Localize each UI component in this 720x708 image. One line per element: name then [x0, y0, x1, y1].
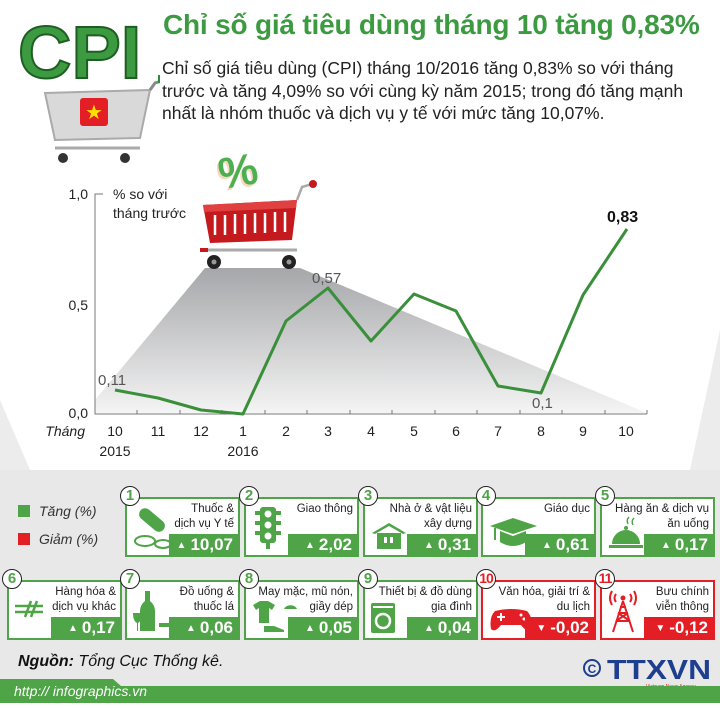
text: 6: [8, 570, 16, 587]
line chart: % so với: [113, 186, 167, 202]
box 2: Giao thông: [297, 503, 353, 515]
line chart: 6: [452, 423, 460, 439]
icon: red cart with %: [200, 144, 317, 269]
text: 4: [482, 487, 490, 504]
box 10: du lịch: [557, 601, 590, 613]
line chart: 10: [107, 423, 123, 439]
line chart: 0,0: [69, 405, 88, 421]
line chart: 12: [193, 423, 209, 439]
line chart: 3: [324, 423, 332, 439]
box 11: viễn thông: [656, 601, 709, 613]
text: 7: [126, 570, 134, 587]
line chart: 8: [537, 423, 545, 439]
source: Nguồn: Tổng Cục Thống kê.: [18, 653, 223, 670]
line chart: 1,0: [69, 186, 88, 202]
box 9: Thiết bị & đồ dùng: [379, 586, 472, 598]
icon: clothes: [253, 601, 297, 632]
box 4: ▲0,61: [542, 535, 589, 554]
box 7: thuốc lá: [194, 601, 234, 613]
logo: TTXVN: Vietnam News Agency: [646, 684, 696, 690]
legend: Giảm (%): [39, 531, 98, 547]
icon: washing machine: [371, 603, 395, 633]
icon: gamepad: [490, 609, 530, 630]
line chart: 5: [410, 423, 418, 439]
icon: antenna tower: [609, 590, 637, 632]
line chart: 0,11: [98, 372, 126, 389]
box 8: ▲0,05: [305, 618, 352, 637]
box 5: [600, 497, 715, 557]
box 6: dịch vụ khác: [52, 601, 116, 613]
icon: bottle and cigarette: [133, 591, 169, 631]
legend: [18, 503, 98, 547]
icon: traffic light: [255, 507, 281, 549]
line chart: 9: [579, 423, 587, 439]
intro text: [162, 58, 683, 123]
logo: CPI cart: CPI: [18, 11, 141, 94]
text: 1: [126, 487, 134, 504]
box 9: ▲0,04: [424, 618, 471, 637]
line chart: 0,83: [607, 209, 638, 226]
box 6: [7, 580, 122, 640]
line chart: 2: [282, 423, 290, 439]
logo: TTXVN: [583, 656, 711, 690]
icon: red cart with %: %: [215, 144, 262, 199]
box 11: Bưu chính: [656, 586, 709, 598]
box 3: xây dựng: [424, 518, 472, 530]
line chart: 10: [618, 423, 634, 439]
box 10: [481, 580, 596, 640]
icon: cloche: [609, 516, 643, 548]
box 10: ▼-0,02: [536, 618, 589, 637]
legend: Tăng (%): [39, 503, 97, 519]
icon: house: [372, 523, 406, 549]
line chart: [45, 144, 648, 459]
box 2: ▲2,02: [305, 535, 352, 554]
box 1: [125, 497, 240, 557]
box 9: gia đình: [431, 601, 472, 613]
line chart: Tháng: [45, 423, 85, 439]
line chart: 0,57: [312, 270, 341, 287]
box 4: [481, 497, 596, 557]
logo: TTXVN: C: [588, 662, 597, 676]
line chart: 1: [239, 423, 247, 439]
box 5: ▲0,17: [661, 535, 708, 554]
box 6: ▲0,17: [68, 618, 115, 637]
box 11: ▼-0,12: [655, 618, 708, 637]
box 4: Giáo dục: [544, 503, 590, 515]
text: 2: [245, 487, 253, 504]
box 8: [244, 580, 359, 640]
box 1: ▲10,07: [177, 535, 233, 554]
icon: hash: [15, 600, 43, 618]
box 8: giầy dép: [310, 601, 353, 613]
logo: CPI cart: [18, 11, 160, 163]
title: Chỉ số giá tiêu dùng tháng 10 tăng 0,83%: [163, 9, 700, 40]
box 11: [600, 580, 715, 640]
line chart: 7: [494, 423, 502, 439]
box 8: May mặc, mũ nón,: [258, 586, 353, 598]
box 2: [244, 497, 359, 557]
text: 3: [364, 487, 372, 504]
footer band with url: [0, 679, 720, 703]
box 6: Hàng hóa &: [55, 586, 116, 598]
text: 5: [601, 487, 609, 504]
logo: CPI cart: ★: [85, 102, 103, 124]
line chart: 2016: [227, 443, 259, 459]
icon: graduation cap: [490, 518, 537, 546]
box 7: ▲0,06: [186, 618, 233, 637]
line chart: tháng trước: [113, 205, 186, 221]
box 3: Nhà ở & vật liệu: [390, 503, 472, 515]
box 1: dịch vụ Y tế: [174, 518, 234, 530]
icon: pills: [134, 508, 169, 549]
box 5: ăn uống: [667, 518, 709, 530]
text: 10: [479, 570, 493, 586]
line chart: 11: [151, 423, 165, 439]
box 3: ▲0,31: [424, 535, 471, 554]
text: 8: [245, 570, 253, 587]
intro text: trước và tăng 4,09% so với cùng kỳ năm 2015; trong đó tăng mạnh: [162, 80, 683, 100]
line chart: 0,5: [69, 297, 88, 313]
line chart: 2015: [99, 443, 131, 459]
line chart: 0,1: [532, 395, 553, 412]
intro text: nhất là nhóm thuốc và dịch vụ y tế với mức tăng 10,07%.: [162, 103, 604, 123]
text: 11: [599, 570, 611, 586]
box 10: Văn hóa, giải trí &: [499, 586, 590, 598]
icon: red cart with %: %: [213, 146, 260, 202]
box 5: Hàng ăn & dịch vụ: [615, 503, 709, 515]
box 7: [125, 580, 240, 640]
box 1: Thuốc &: [191, 503, 234, 515]
footer band with url: http:// infographics.vn: [14, 683, 147, 699]
box 7: Đồ uống &: [180, 586, 234, 598]
intro text: Chỉ số giá tiêu dùng (CPI) tháng 10/2016 tăng 0,83% so với tháng: [162, 58, 674, 78]
box 9: [363, 580, 478, 640]
text: 9: [364, 570, 372, 587]
line chart: 4: [367, 423, 375, 439]
box 3: [363, 497, 478, 557]
